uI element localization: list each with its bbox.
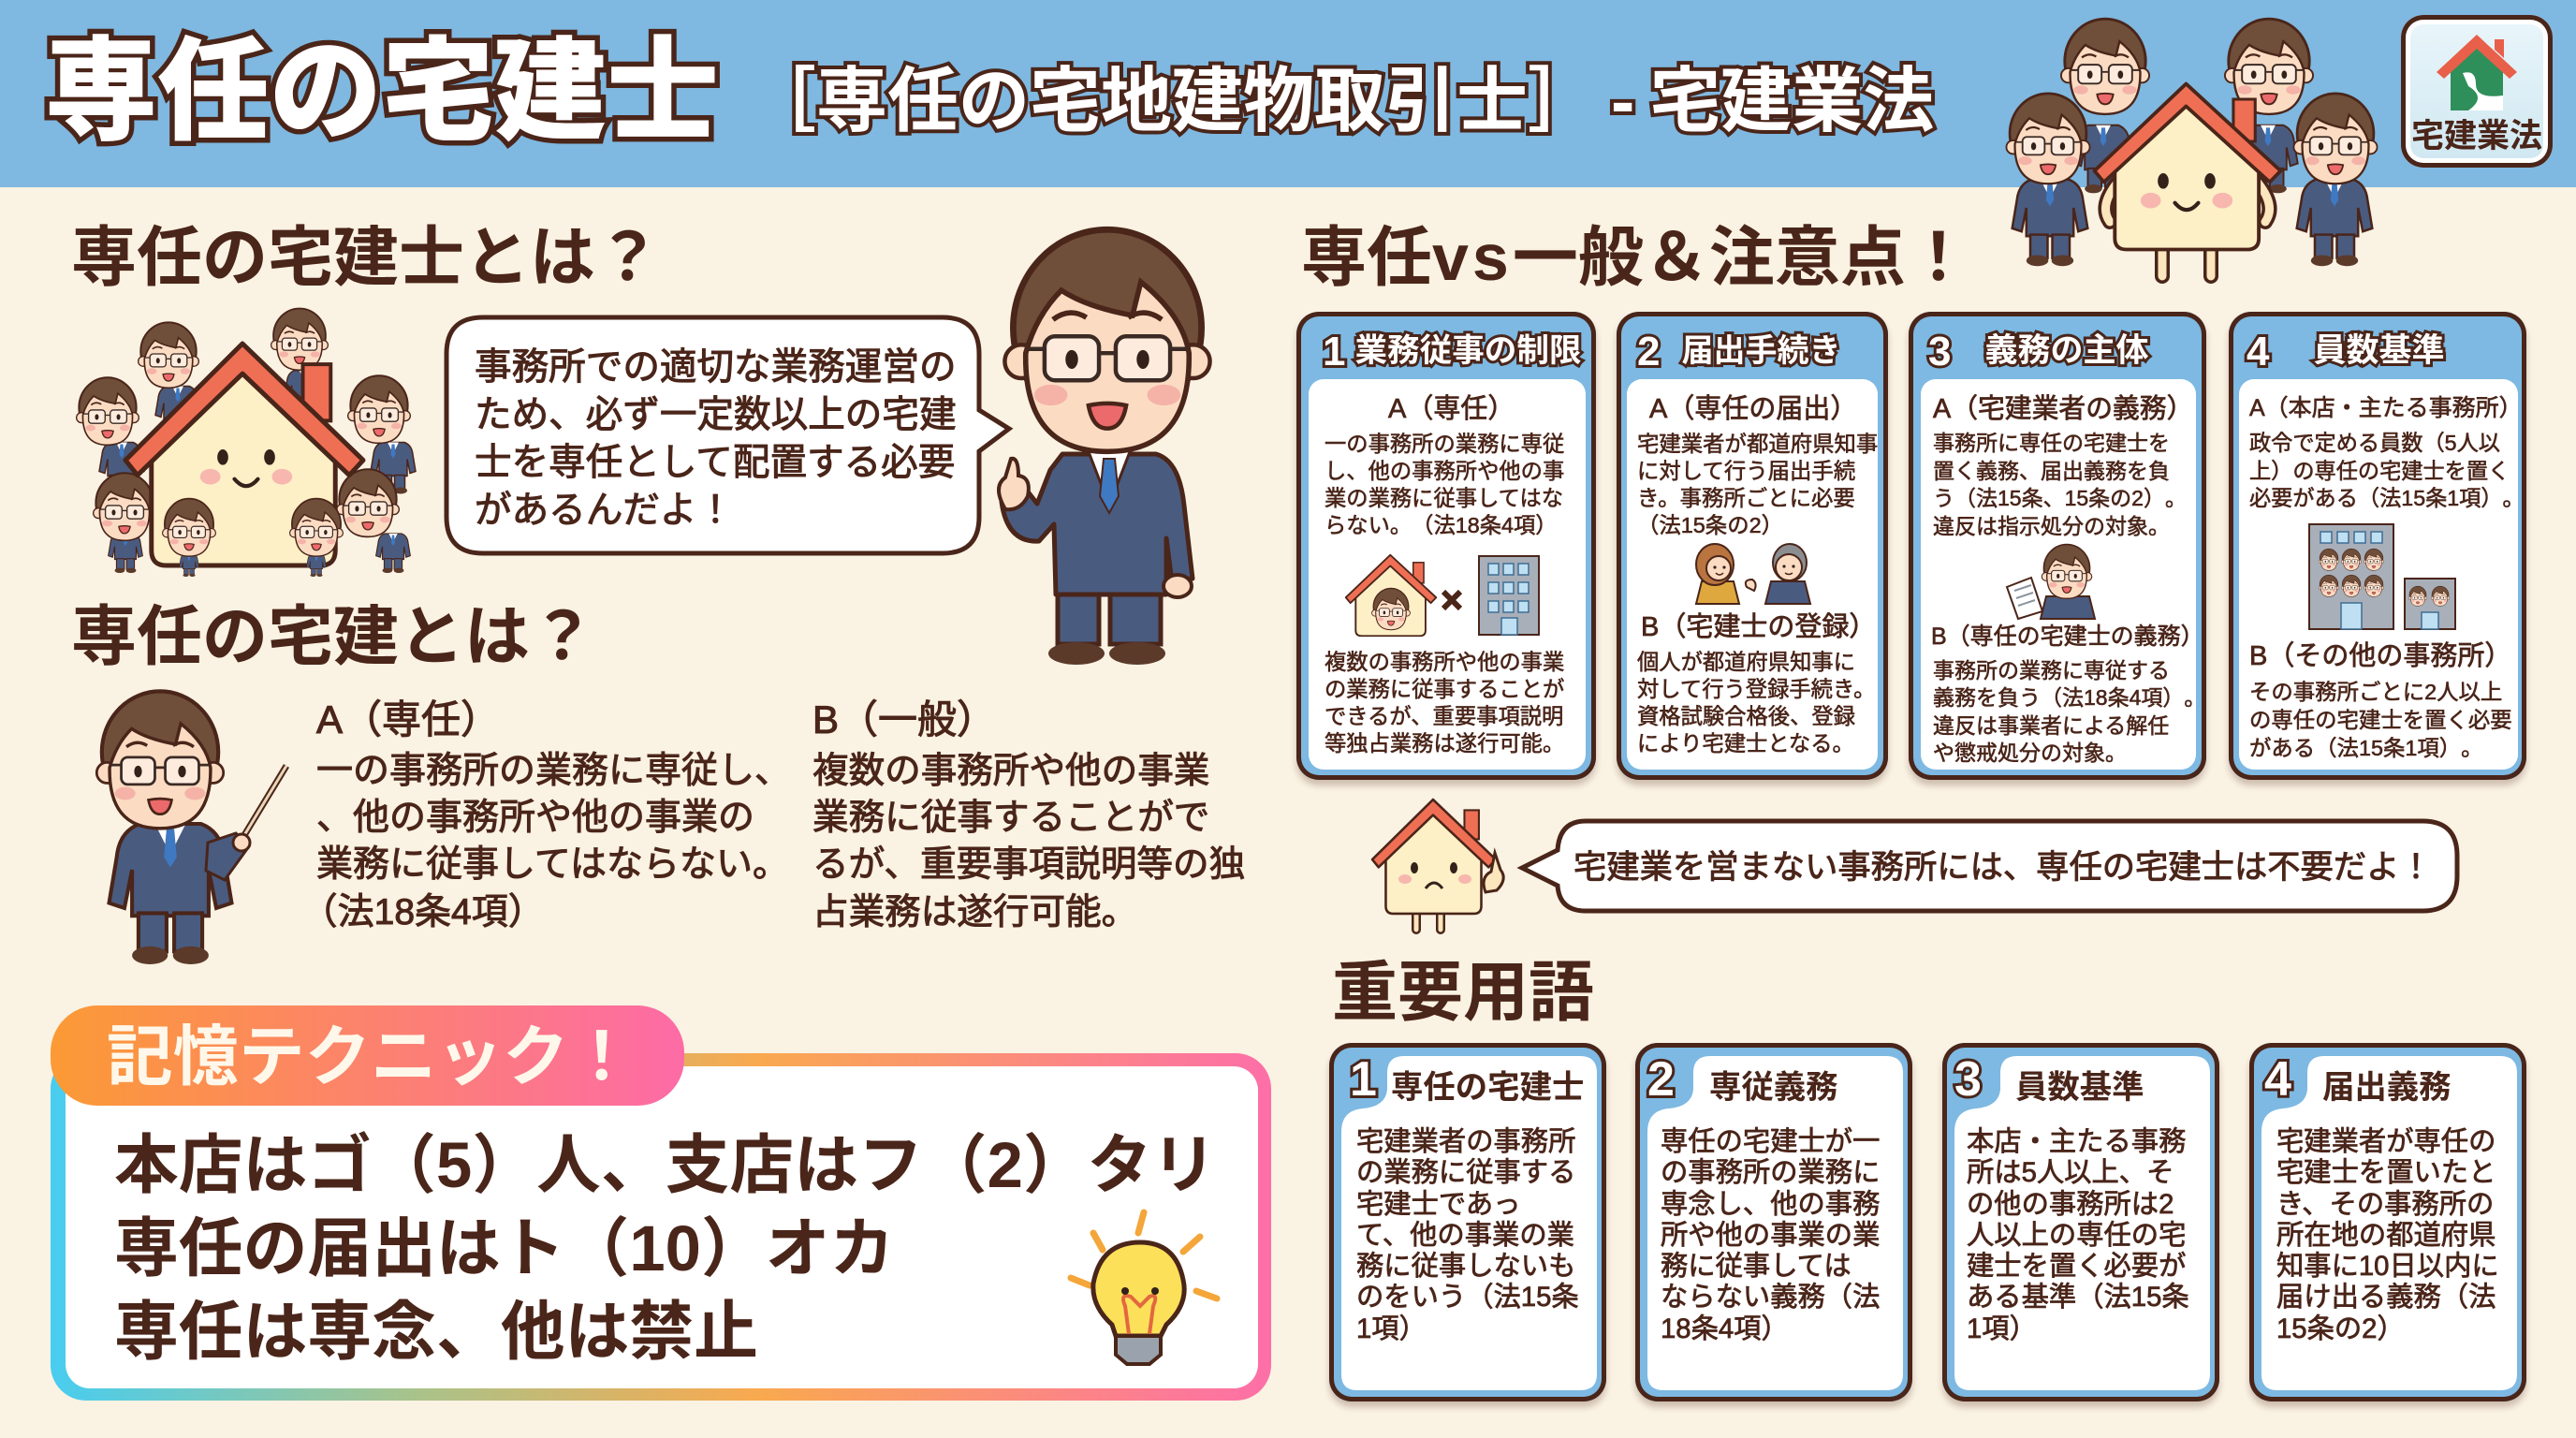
text A: （法15条の2） (1637, 513, 1783, 537)
term title: 専従義務 (1709, 1070, 1838, 1106)
text A: 置く義務、届出義務を負 (1933, 459, 2170, 483)
term title: 員数基準 (2015, 1070, 2144, 1106)
text A (1325, 431, 1564, 537)
bubble text: ため、必ず一定数以上の宅建 (475, 394, 957, 435)
text B: がある（法15条1項）。 (2249, 736, 2483, 760)
term text (2276, 1126, 2499, 1344)
panel: memory technique (51, 1005, 1271, 1401)
icon: light bulb (1067, 1210, 1221, 1366)
term text (1356, 1126, 1579, 1344)
text A: 事務所に専任の宅建士を (1933, 431, 2170, 455)
term text: 1項） (1967, 1313, 2037, 1344)
text A: う（法15条、15条の2）。 (1933, 486, 2187, 510)
text B: 事務所の業務に専従する (1933, 658, 2170, 682)
tag (51, 1005, 684, 1106)
text B: 資格試験合格後、登録 (1637, 704, 1855, 728)
panel: term 4 (2249, 1043, 2526, 1401)
card title: 4 員数基準 (2247, 329, 2445, 374)
text B (2249, 680, 2512, 760)
label A: A（宅建業者の義務） (1933, 394, 2193, 424)
heading: senin vs general: 専任vs一般＆注意点！ (1301, 221, 1971, 294)
text B: により宅建士となる。 (1637, 730, 1854, 755)
term text: 知事に10日以内に (2276, 1251, 2499, 1282)
mnemonic lines: 専任は専念、他は禁止 (114, 1296, 758, 1368)
card title: 3 義務の主体 (1928, 329, 2149, 374)
label B: B（一般） (812, 697, 996, 741)
illustration: presenter man pointing (996, 227, 1212, 665)
illustration: man with pointer (95, 689, 289, 964)
panel border (51, 1053, 1271, 1401)
text A: 政令で定める員数（5人以 (2249, 431, 2500, 455)
text B: るが、重要事項説明等の独 (812, 844, 1245, 885)
label-free text B: の業務に従事することが (1325, 676, 1564, 700)
illustration: agents surrounding house (76, 307, 417, 577)
logo label: 宅建業法 (2411, 118, 2542, 154)
term text: 人以上の専任の宅 (1967, 1220, 2186, 1251)
text B: の専任の宅建士を置く必要 (2249, 708, 2512, 732)
label B: B（その他の事務所） (2249, 641, 2511, 671)
heading: what is senin takken: 専任の宅建とは？ (71, 600, 595, 673)
term number: 1 (1350, 1052, 1377, 1107)
term text: 所や他の事業の業 (1661, 1220, 1880, 1251)
icon: two people (1694, 543, 1812, 605)
text A (2249, 431, 2525, 510)
text A: 業の業務に従事してはな (1325, 485, 1563, 509)
text B: や懲戒処分の対象。 (1933, 741, 2127, 765)
comparison: B general (812, 697, 1245, 932)
subtitle: ［専任の宅地建物取引士］ (745, 62, 1599, 141)
text A (1933, 431, 2187, 537)
panel: card 2 notification (1617, 312, 1888, 780)
text B: 複数の事務所や他の事業 (812, 751, 1209, 791)
text A: 上）の専任の宅建士を置く (2249, 459, 2510, 483)
term text: 本店・主たる事務 (1967, 1126, 2186, 1157)
icon: cross mark (1442, 590, 1462, 610)
term text: の他の事務所は2 (1967, 1189, 2174, 1220)
text A: き。事務所ごとに必要 (1637, 485, 1855, 509)
text B (812, 751, 1245, 932)
label-free text B: できるが、重要事項説明 (1325, 704, 1563, 728)
term text (1661, 1126, 1880, 1344)
term text: 所在地の都道府県 (2276, 1220, 2496, 1251)
text B: 義務を負う（法18条4項）。 (1933, 685, 2205, 710)
term text: 届け出る義務（法 (2276, 1282, 2496, 1313)
icon: logo house (2437, 35, 2517, 110)
logo badge (2401, 15, 2553, 168)
card title: 1 業務従事の制限 (1323, 329, 1582, 374)
term text: 宅建業者の事務所 (1356, 1126, 1575, 1157)
text A: し、他の事務所や他の事 (1325, 459, 1564, 483)
label-free text B: 複数の事務所や他の事業 (1325, 650, 1564, 674)
label-free text B (1325, 650, 1564, 755)
text A: 違反は指示処分の対象。 (1933, 513, 2170, 537)
bubble text: があるんだよ！ (475, 490, 734, 531)
term text: 務に従事しては (1661, 1251, 1852, 1282)
text B: 個人が都道府県知事に (1637, 650, 1855, 674)
term text: 18条4項） (1661, 1313, 1789, 1344)
label A: A（専任の届出） (1649, 394, 1857, 424)
callout bubble (1516, 818, 2460, 914)
term text: 建士を置く必要が (1967, 1251, 2186, 1282)
term text (1967, 1126, 2189, 1344)
text B: 対して行う登録手続き。 (1637, 676, 1875, 700)
subtitle: law name: -宅建業法 (1611, 62, 1934, 141)
label A: A（専任） (1388, 394, 1515, 424)
term text: 専念し、他の事務 (1661, 1189, 1880, 1220)
text A: 、他の事務所や他の事業の (316, 798, 754, 838)
mnemonic lines (114, 1129, 1216, 1368)
text A: 業務に従事してはならない。 (316, 844, 789, 885)
term text: 宅建士を置いたと (2276, 1157, 2496, 1188)
label-free text B: 等独占業務は遂行可能。 (1325, 730, 1564, 755)
text A: らない。（法18条4項） (1325, 513, 1558, 537)
text A (301, 751, 791, 932)
text A: 一の事務所の業務に専従 (1325, 431, 1564, 455)
term text: ある基準（法15条 (1967, 1282, 2189, 1313)
bubble text: 士を専任として配置する必要 (475, 442, 955, 483)
icon: person at house (1344, 554, 1438, 637)
term text: ならない義務（法 (1661, 1282, 1880, 1313)
panel: card 1 work restriction (1296, 312, 1596, 780)
heading: key terms: 重要用語 (1332, 956, 1594, 1029)
heading: what is senin takkenshi: 専任の宅建士とは？ (71, 221, 661, 294)
term text: のをいう（法15条 (1356, 1282, 1579, 1313)
callout text: 宅建業を営まない事務所には、専任の宅建士は不要だよ！ (1573, 849, 2433, 886)
comparison: A exclusive (301, 697, 791, 932)
term text: 所は5人以上、そ (1967, 1157, 2174, 1188)
panel: card 3 duty subject (1909, 312, 2206, 780)
text A (1637, 431, 1878, 537)
text B: その事務所ごとに2人以上 (2249, 680, 2502, 704)
text A: 宅建業者が都道府県知事 (1637, 431, 1878, 455)
text B: 違反は事業者による解任 (1933, 713, 2169, 738)
card title: 2 届出手続き (1637, 329, 1840, 374)
term text: き、その事務所の (2276, 1189, 2494, 1220)
term title: 専任の宅建士 (1391, 1070, 1584, 1106)
term text: 宅建業者が専任の (2276, 1126, 2496, 1157)
text B (1637, 650, 1875, 755)
label B: B（専任の宅建士の義務） (1931, 624, 2204, 650)
term text: の事務所の業務に (1661, 1157, 1880, 1188)
icon: office building (1478, 555, 1540, 636)
text A: 必要がある（法15条1項）。 (2249, 486, 2525, 510)
label A: A（専任） (316, 697, 500, 741)
text B: 占業務は遂行可能。 (812, 892, 1137, 932)
bubble text: 事務所での適切な業務運営の (475, 346, 957, 388)
mnemonic lines: 専任の届出はト（10）オカ (114, 1212, 894, 1284)
text A: （法18条4項） (301, 892, 545, 932)
text B (1933, 658, 2205, 765)
text A: に対して行う届出手続 (1637, 459, 1855, 483)
term title: 届出義務 (2322, 1070, 2452, 1106)
label A: A（本店・主たる事務所） (2249, 395, 2523, 421)
speech bubble: explanation (444, 315, 1013, 556)
illustration: worried house mascot (1370, 798, 1505, 934)
term number: 4 (2264, 1052, 2291, 1107)
panel: term 3 (1942, 1043, 2219, 1401)
term number: 2 (1647, 1052, 1675, 1107)
panel: card 4 headcount standard (2229, 312, 2526, 780)
text A: 一の事務所の業務に専従し、 (316, 751, 791, 791)
term text: て、他の事業の業 (1356, 1220, 1574, 1251)
term text: 専任の宅建士が一 (1661, 1126, 1880, 1157)
illustration: four agents with house mascot (2005, 17, 2378, 284)
term text: 1項） (1356, 1313, 1427, 1344)
bubble text (475, 346, 957, 531)
header band (0, 0, 2576, 187)
icon: buildings with staff (2308, 523, 2456, 630)
icon: worried man with document (2005, 543, 2097, 620)
tag text: 記憶テクニック！ (107, 1020, 635, 1093)
title: 専任の宅建士 (45, 29, 719, 154)
term number: 3 (1954, 1052, 1982, 1107)
term text: 宅建士であっ (1356, 1189, 1520, 1220)
text B: 業務に従事することがで (812, 798, 1209, 838)
label B: B（宅建士の登録） (1641, 612, 1876, 642)
panel: term 2 (1635, 1043, 1912, 1401)
term text: 15条の2） (2276, 1313, 2405, 1344)
term text: の業務に従事する (1356, 1157, 1575, 1188)
term text: 務に従事しないも (1356, 1251, 1575, 1282)
panel: term 1 (1329, 1043, 1606, 1401)
mnemonic lines: 本店はゴ（5）人、支店はフ（2）タリ (114, 1129, 1216, 1201)
